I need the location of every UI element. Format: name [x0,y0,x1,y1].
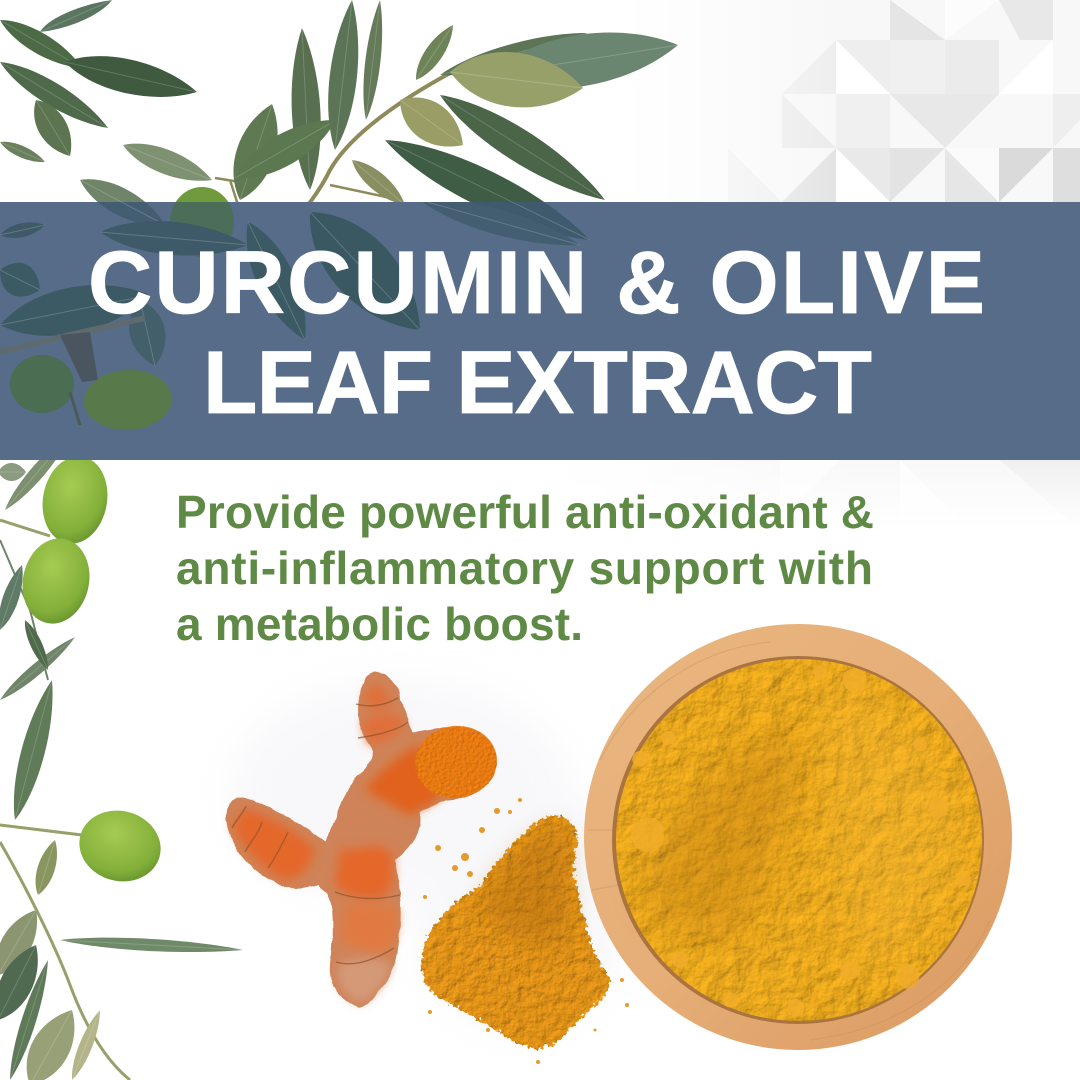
title: LEAF EXTRACT [203,332,872,432]
branch stems [280,72,452,240]
soft shadows around turmeric [230,680,630,1030]
powder speckles [423,798,629,1064]
leaves left [0,428,244,1080]
powder lumps [631,665,972,1017]
title banner [0,202,1080,460]
olive at banner edge [170,187,234,257]
wooden bowl of turmeric powder [584,624,1012,1050]
background geometric pattern [730,0,1080,202]
leaves top centre [222,0,682,256]
leaves top left [0,0,216,237]
cut end of root [410,721,502,803]
olive branch top [0,0,682,257]
subtitle [176,486,874,650]
turmeric root [226,672,502,1008]
olive branch left and bottom [0,428,244,1080]
powder fill [616,659,982,1021]
subtitle: anti-inflammatory support with [176,542,873,594]
foliage seen through banner [0,202,590,430]
title: CURCUMIN & OLIVE [88,232,985,332]
subtitle: a metabolic boost. [176,598,583,650]
subtitle: Provide powerful anti-oxidant & [176,486,874,538]
title [88,232,985,432]
stems [0,520,130,1080]
turmeric powder pile [422,798,629,1064]
olives [15,451,169,890]
pattern fade below banner [1000,460,1080,490]
